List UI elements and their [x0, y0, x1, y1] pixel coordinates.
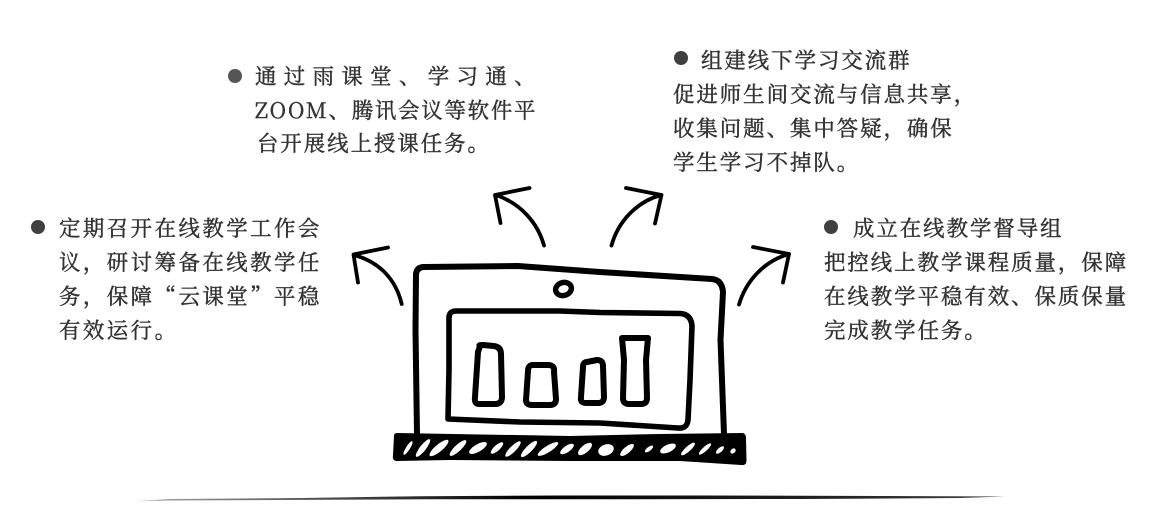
text block: top left: [228, 60, 543, 158]
text block: top right: 收集问题、集中答疑，确保: [673, 112, 954, 143]
text block: left: [31, 212, 322, 345]
bar 4: [622, 338, 648, 404]
arrow: up left outer: [354, 248, 402, 304]
text block: right: [824, 212, 1128, 345]
text block: top right: [673, 44, 977, 177]
text block: top left: ZOOM、腾讯会议等软件平: [255, 94, 537, 125]
camera: [554, 281, 573, 297]
ground line: [137, 496, 1005, 501]
bar chart: [475, 338, 648, 405]
arrow: up left inner: [495, 188, 544, 246]
arrow: up right outer: [739, 247, 789, 304]
laptop base: [393, 433, 746, 465]
arrow: up right inner: [612, 188, 662, 246]
bullet: [31, 220, 45, 234]
text block: right: 完成教学任务。: [824, 314, 988, 345]
text block: right: 在线教学平稳有效、保质保量: [824, 280, 1128, 311]
text block: left: 务，保障“云课堂”平稳: [59, 280, 322, 311]
text block: top left: 通过雨课堂、学习通、: [255, 60, 543, 91]
screen: [448, 311, 692, 428]
text block: right: 成立在线教学督导组: [853, 212, 1064, 243]
text block: right: 把控线上教学课程质量，保障: [824, 246, 1128, 277]
bar 3: [581, 360, 604, 403]
text block: left: 议，研讨筹备在线教学任: [59, 246, 322, 277]
text block: top right: 学生学习不掉队。: [673, 146, 860, 177]
text block: top left: 台开展线上授课任务。: [257, 127, 491, 158]
bar 1: [475, 345, 502, 404]
bullet: [824, 220, 838, 234]
bullet: [228, 69, 242, 83]
bar 2: [526, 365, 556, 405]
text block: left: 定期召开在线教学工作会: [59, 212, 322, 243]
bullet: [674, 51, 688, 65]
laptop frame: [416, 266, 724, 434]
text block: top right: 促进师生间交流与信息共享，: [673, 78, 977, 109]
text block: top right: 组建线下学习交流群: [701, 44, 912, 75]
text block: left: 有效运行。: [59, 314, 178, 345]
